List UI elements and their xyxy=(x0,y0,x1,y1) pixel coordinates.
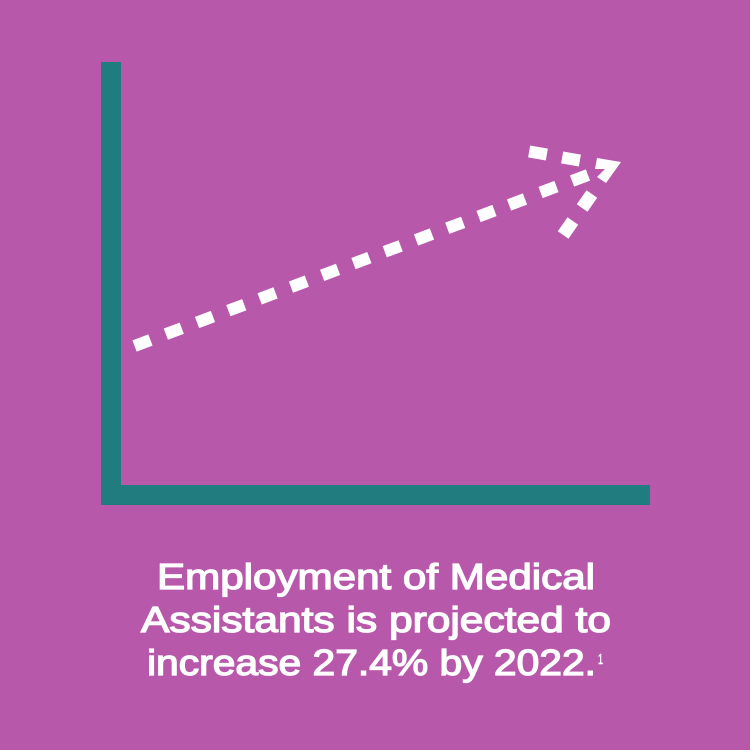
caption text: increase 27.4% by 2022. xyxy=(147,642,596,683)
caption text xyxy=(141,556,611,683)
chart axes xyxy=(101,62,650,505)
caption text: Assistants is projected to xyxy=(141,599,611,640)
arrow shaft dashes xyxy=(132,169,590,352)
arrowhead upper dashes xyxy=(528,146,581,166)
caption text: Employment of Medical xyxy=(157,556,595,597)
arrowhead tip xyxy=(595,158,621,183)
icon: dashed upward arrow xyxy=(132,146,621,352)
footnote marker: 1 xyxy=(598,651,603,668)
arrowhead lower dashes xyxy=(558,190,597,239)
